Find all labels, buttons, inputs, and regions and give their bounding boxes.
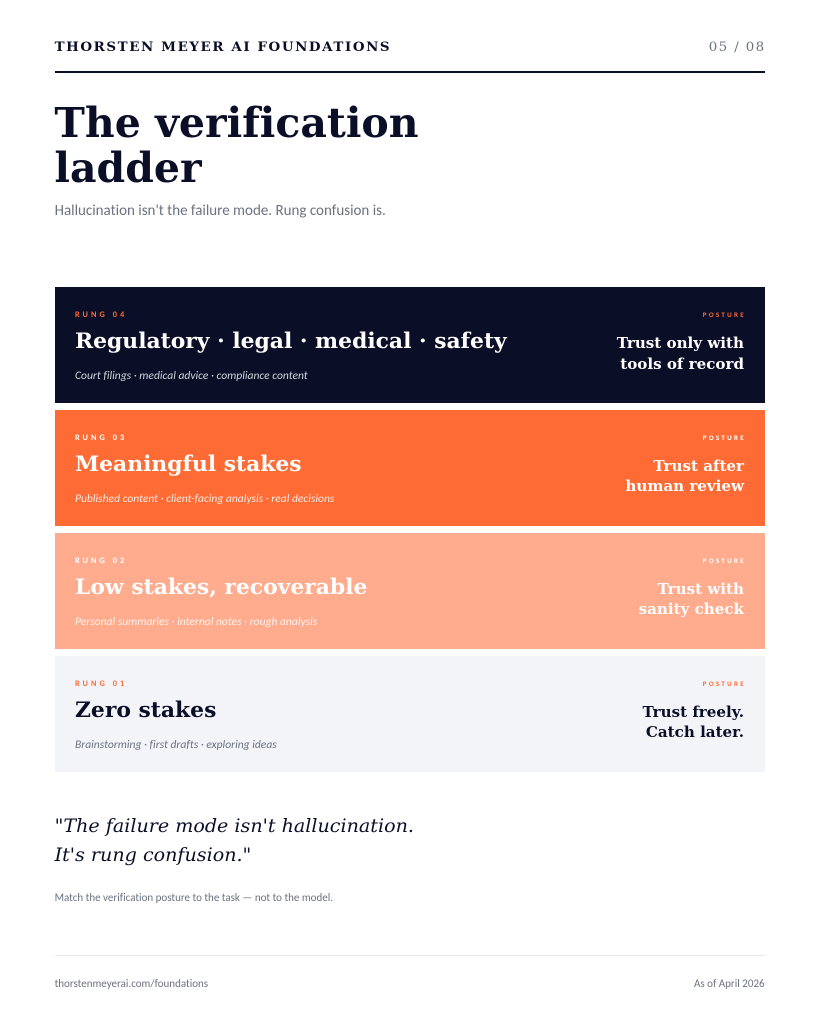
rung examples 02: Personal summaries · internal notes · rough analysis [75,615,317,629]
rung label 02: RUNG 02 [75,556,127,566]
posture text 03 [625,457,744,495]
title: The verification [54,98,419,146]
posture text 03: human review [625,477,744,495]
posture text 03: Trust after [653,457,744,475]
posture text 04: Trust only with [617,334,744,352]
rung examples 04: Court filings · medical advice · compliance content [75,369,308,383]
panel: rung 03 [55,410,765,526]
panel: rung 01 [55,656,765,772]
panel: rung 02 [55,533,765,649]
rung label 04: RUNG 04 [75,310,127,320]
posture label 04: POSTURE [703,310,746,319]
posture text 04: tools of record [620,355,744,373]
posture text 02: Trust with [658,580,744,598]
pull quote [54,814,414,866]
header rule [55,71,765,72]
rung label 03: RUNG 03 [75,433,127,443]
footer url: thorstenmeyerai.com/foundations [55,977,208,990]
rung heading 01: Zero stakes [75,697,216,723]
rung heading 02: Low stakes, recoverable [75,574,367,600]
posture text 01: Catch later. [646,723,744,741]
panel: rung 04 [55,287,765,403]
quote caption: Match the verification posture to the task — not to the model. [55,891,333,904]
posture text 02 [639,580,744,618]
footer date: As of April 2026 [694,977,765,990]
posture text 04 [616,334,744,373]
pull quote: "The failure mode isn't hallucination. [55,814,414,837]
posture label 01: POSTURE [703,679,746,688]
rung examples 01: Brainstorming · first drafts · exploring ideas [75,738,277,752]
pull quote: It's rung confusion." [55,843,251,866]
subtitle: Hallucination isn't the failure mode. Rung confusion is. [55,202,386,220]
title [54,98,419,192]
posture label 03: POSTURE [703,433,746,442]
posture text 02: sanity check [639,600,744,618]
rung heading 03: Meaningful stakes [75,451,302,477]
header label: THORSTEN MEYER AI FOUNDATIONS [55,39,391,55]
rung examples 03: Published content · client-facing analysis · real decisions [75,492,334,506]
posture text 01 [642,703,744,741]
page number: 05 / 08 [709,40,766,55]
title: ladder [54,144,202,192]
footer rule [55,955,765,956]
posture label 02: POSTURE [703,556,746,565]
rung label 01: RUNG 01 [75,679,127,689]
rung heading 04: Regulatory · legal · medical · safety [75,328,507,354]
posture text 01: Trust freely. [643,703,744,721]
